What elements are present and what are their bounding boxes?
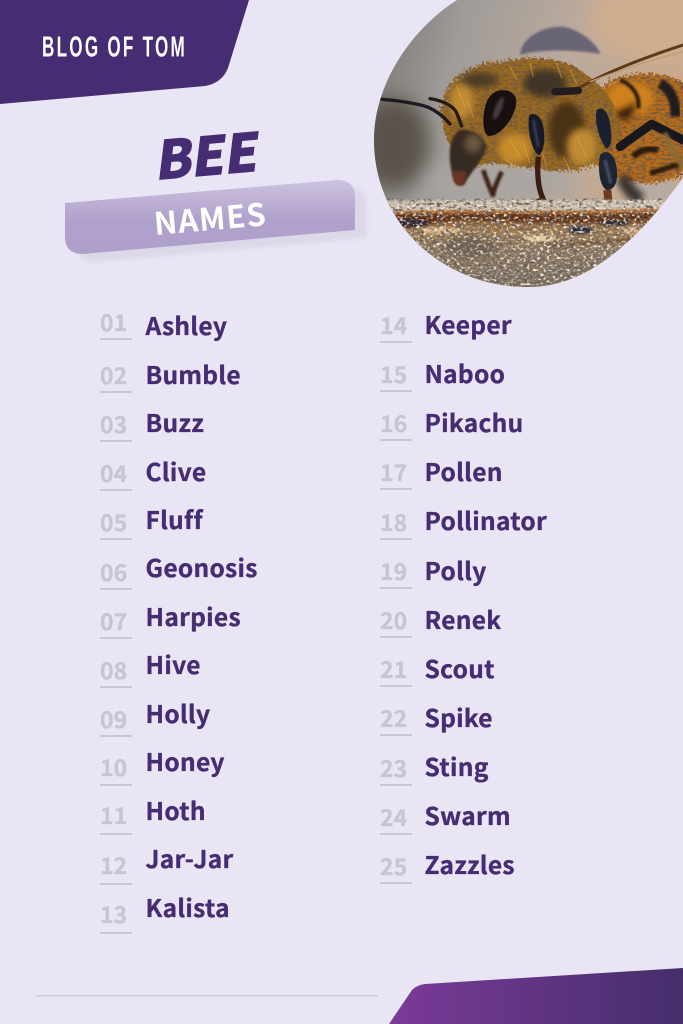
- item 06: [100, 550, 258, 590]
- hind leg: [620, 124, 683, 147]
- item 02: Bumble: [146, 357, 241, 392]
- item 21: Scout: [424, 651, 495, 686]
- item 17: Pollen: [424, 454, 503, 489]
- item 24: 24: [380, 799, 407, 833]
- item 02: 02: [100, 357, 127, 391]
- front leg: [529, 114, 544, 155]
- item 05: [100, 502, 204, 540]
- abdomen: [580, 73, 683, 183]
- item 11: 11: [100, 797, 127, 831]
- item 12: 12: [100, 847, 127, 881]
- hidden leg: [483, 170, 502, 197]
- item 04: Clive: [146, 454, 206, 489]
- item 20: Renek: [424, 602, 501, 637]
- item 08: [100, 647, 201, 688]
- item 24: [380, 798, 511, 835]
- names list: column 1: [100, 304, 258, 934]
- item 01: [100, 304, 227, 343]
- item 05: 05: [100, 504, 127, 538]
- item 20: 20: [380, 602, 407, 636]
- item 12: [100, 841, 234, 885]
- item 21: [380, 651, 495, 687]
- blurred far wing: [520, 27, 601, 55]
- item 16: 16: [380, 405, 407, 439]
- item 25: Zazzles: [424, 847, 515, 882]
- footer corner banner: [389, 968, 683, 1024]
- item 04: [100, 454, 206, 491]
- item 02: [100, 357, 241, 393]
- item 23: [380, 749, 489, 786]
- title ribbon: NAMES: [65, 180, 367, 262]
- item 23: 23: [380, 750, 407, 784]
- item 10: Honey: [146, 744, 225, 779]
- item 19: Polly: [424, 553, 487, 588]
- item 07: [100, 599, 241, 639]
- item 07: 07: [100, 603, 127, 637]
- item 18: Pollinator: [424, 503, 547, 538]
- item 06: 06: [100, 554, 127, 588]
- item 16: Pikachu: [424, 405, 524, 440]
- item 17: [380, 454, 503, 490]
- item 07: Harpies: [146, 599, 241, 634]
- header banner: [0, 0, 249, 104]
- item 18: [380, 503, 547, 540]
- item 03: Buzz: [146, 405, 204, 440]
- face: [450, 130, 487, 185]
- item 24: Swarm: [424, 798, 511, 833]
- footer divider line: [36, 995, 378, 996]
- item 11: Hoth: [146, 793, 206, 828]
- item 03: [100, 405, 204, 442]
- item 08: Hive: [146, 647, 201, 682]
- bark: [388, 200, 666, 287]
- item 09: Holly: [146, 696, 210, 731]
- item 19: [380, 553, 487, 589]
- fur strands: [447, 63, 587, 170]
- item 21: 21: [380, 651, 407, 685]
- item 23: Sting: [424, 749, 489, 784]
- item 16: [380, 405, 524, 441]
- item 13: Kalista: [146, 890, 230, 925]
- item 19: 19: [380, 553, 407, 587]
- middle leg: [596, 109, 611, 148]
- item 13: 13: [100, 896, 127, 930]
- item 25: [380, 847, 515, 884]
- item 12: Jar-Jar: [146, 841, 234, 876]
- item 08: 08: [100, 652, 127, 686]
- item 14: [380, 307, 512, 343]
- item 09: [100, 696, 210, 737]
- item 22: [380, 700, 493, 736]
- item 10: 10: [100, 749, 127, 783]
- title: BEE: BEE: [153, 110, 264, 196]
- wing strut: [555, 45, 683, 92]
- thorax and head fur: [442, 58, 619, 171]
- brand name: BLOG OF TOM: [42, 31, 185, 63]
- soft background tones: [357, 97, 430, 190]
- item 22: Spike: [424, 700, 493, 735]
- item 15: 15: [380, 356, 407, 390]
- item 03: 03: [100, 406, 127, 440]
- item 01: Ashley: [146, 308, 227, 343]
- item 14: 14: [380, 307, 407, 341]
- item 13: [100, 890, 230, 934]
- title ribbon: NAMES: NAMES: [152, 189, 268, 244]
- item 01: 01: [100, 304, 127, 338]
- item 04: 04: [100, 455, 127, 489]
- item 17: 17: [380, 454, 407, 488]
- item 25: 25: [380, 848, 407, 882]
- item 18: 18: [380, 504, 407, 538]
- names list: column 2: [380, 307, 547, 884]
- item 15: Naboo: [424, 356, 505, 391]
- item 14: Keeper: [424, 307, 512, 342]
- item 09: 09: [100, 701, 127, 735]
- item 15: [380, 356, 505, 392]
- item 22: 22: [380, 700, 407, 734]
- item 10: [100, 744, 225, 786]
- compound eye: [483, 90, 516, 136]
- item 20: [380, 602, 502, 638]
- item 05: Fluff: [146, 502, 203, 537]
- photo: honey bee on bark: [357, 0, 683, 300]
- item 06: Geonosis: [146, 550, 258, 585]
- item 11: [100, 793, 206, 835]
- antennae: [382, 99, 462, 126]
